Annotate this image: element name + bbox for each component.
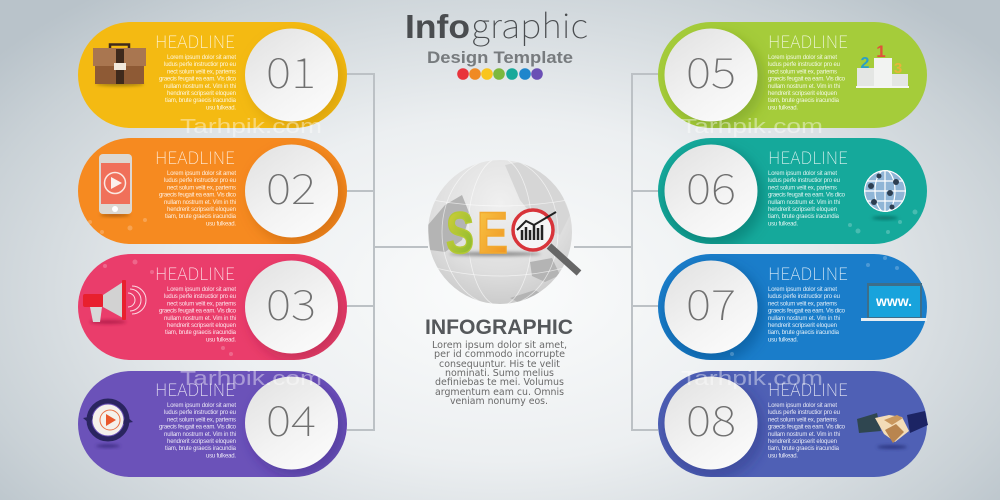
panel: 03 — [78, 254, 347, 361]
body text: nect solum velit ex, partems — [167, 185, 236, 191]
number circle: 02 — [266, 156, 316, 217]
panel: 06 — [658, 138, 927, 247]
magnifier with chart — [513, 210, 579, 273]
body text: usu fulkead. — [206, 105, 236, 111]
body text: graecis feugait ea eam. Vis dico — [768, 309, 846, 315]
number circle — [664, 376, 758, 470]
colour dots — [457, 68, 543, 80]
icon: laptop www — [861, 283, 927, 321]
body text: ludus perfe instructior pro eu — [164, 410, 236, 416]
headline: HEADLINE — [155, 145, 235, 170]
body text: usu fulkead. — [206, 453, 236, 459]
body text — [159, 287, 237, 343]
body text: ludus perfe instructior pro eu — [164, 178, 236, 184]
subtitle: Design Template — [427, 48, 573, 67]
body text — [768, 55, 846, 111]
body text: usu fulkead. — [206, 221, 236, 227]
icon: SEO globe — [428, 158, 579, 306]
headline: HEADLINE — [155, 377, 235, 402]
seo letters: S — [446, 201, 474, 266]
body text: Lorem ipsum dolor sit amet — [167, 171, 236, 177]
headline: HEADLINE — [155, 261, 235, 286]
body text: usu fulkead. — [768, 221, 798, 227]
left connector lines — [347, 74, 428, 430]
body text: Lorem ipsum dolor sit amet — [167, 287, 236, 293]
body text: tiam, brute graecis iracundia — [768, 214, 840, 220]
right connector lines — [574, 74, 658, 430]
body text — [159, 171, 237, 227]
body text: hendrerit scripserit eloquen — [167, 439, 236, 445]
seo letters: E — [477, 201, 508, 266]
title — [405, 0, 588, 48]
body text: nullam nostrum et. Vim in thi — [164, 200, 236, 206]
body text: usu fulkead. — [206, 337, 236, 343]
panel: 02 — [78, 138, 347, 245]
number circle: 07 — [686, 272, 736, 333]
body text — [768, 171, 846, 227]
body text: graecis feugait ea eam. Vis dico — [768, 425, 846, 431]
body text: Lorem ipsum dolor sit amet — [768, 171, 837, 177]
center paragraph: consequuntur. His te velit — [439, 359, 560, 370]
body text: hendrerit scripserit eloquen — [167, 91, 236, 97]
watermarks: Tarhpik.com — [681, 116, 823, 138]
number circle: 08 — [686, 388, 736, 449]
body text: ludus perfe instructior pro eu — [768, 294, 840, 300]
body text: ludus perfe instructior pro eu — [768, 62, 840, 68]
center paragraph: definiebas te mei. Volumus — [435, 377, 564, 388]
body text: graecis feugait ea eam. Vis dico — [768, 77, 846, 83]
body text: graecis feugait ea eam. Vis dico — [159, 193, 237, 199]
body text: tiam, brute graecis iracundia — [165, 214, 237, 220]
title: Info — [405, 8, 470, 45]
body text: hendrerit scripserit eloquen — [768, 91, 837, 97]
panel: 01 — [78, 22, 347, 129]
center paragraph — [432, 340, 567, 407]
body text: ludus perfe instructior pro eu — [164, 62, 236, 68]
body text — [159, 55, 237, 111]
panel: 04 — [78, 371, 347, 477]
body text: tiam, brute graecis iracundia — [165, 98, 237, 104]
body text: tiam, brute graecis iracundia — [768, 330, 840, 336]
watermarks: Tarhpik.com — [180, 368, 322, 390]
body text: nect solum velit ex, partems — [768, 185, 837, 191]
body text: tiam, brute graecis iracundia — [768, 98, 840, 104]
center paragraph: veniam nonumy eos. — [450, 396, 548, 407]
panel: 08 — [658, 371, 928, 479]
body text: nullam nostrum et. Vim in thi — [768, 316, 840, 322]
body text: tiam, brute graecis iracundia — [768, 446, 840, 452]
headline: HEADLINE — [768, 377, 848, 402]
number circle: 05 — [686, 40, 736, 101]
body text: ludus perfe instructior pro eu — [164, 294, 236, 300]
body text: Lorem ipsum dolor sit amet — [167, 403, 236, 409]
icon: megaphone — [83, 280, 146, 324]
body text: nullam nostrum et. Vim in thi — [164, 84, 236, 90]
body text: usu fulkead. — [768, 453, 798, 459]
number circle: 06 — [686, 156, 736, 217]
body text: nullam nostrum et. Vim in thi — [768, 84, 840, 90]
body text: hendrerit scripserit eloquen — [167, 323, 236, 329]
icon: laptop www: www. — [875, 293, 912, 309]
body text — [159, 403, 237, 459]
body text: usu fulkead. — [768, 105, 798, 111]
headline: HEADLINE — [768, 145, 848, 170]
infographic canvas — [78, 12, 928, 477]
number circle: 01 — [266, 40, 316, 101]
body text: tiam, brute graecis iracundia — [165, 330, 237, 336]
center paragraph: Lorem ipsum dolor sit amet, — [432, 340, 567, 351]
body text: Lorem ipsum dolor sit amet — [768, 287, 837, 293]
body text: graecis feugait ea eam. Vis dico — [159, 77, 237, 83]
body text: Lorem ipsum dolor sit amet — [167, 55, 236, 61]
number circle — [245, 260, 338, 354]
headline: HEADLINE — [155, 29, 235, 54]
watermarks: Tarhpik.com — [180, 116, 322, 138]
icon: podium: 1 — [876, 42, 886, 61]
icon: video cycle — [83, 401, 133, 448]
body text — [768, 287, 846, 343]
title: graphic — [471, 0, 588, 48]
body text: hendrerit scripserit eloquen — [768, 323, 837, 329]
headline: HEADLINE — [768, 261, 848, 286]
body text — [768, 403, 846, 459]
number circle: 04 — [266, 388, 316, 449]
watermarks: Tarhpik.com — [681, 368, 823, 390]
body text: tiam, brute graecis iracundia — [165, 446, 237, 452]
body text: hendrerit scripserit eloquen — [768, 207, 837, 213]
panel: 07 — [658, 254, 927, 363]
icon: handshake — [857, 411, 928, 449]
body text: nullam nostrum et. Vim in thi — [768, 432, 840, 438]
seo letters — [446, 201, 508, 266]
body text: hendrerit scripserit eloquen — [167, 207, 236, 213]
body text: nect solum velit ex, partems — [768, 301, 837, 307]
body text: ludus perfe instructior pro eu — [768, 410, 840, 416]
icon: people globe — [864, 170, 906, 220]
center heading: INFOGRAPHIC — [425, 316, 573, 339]
body text: hendrerit scripserit eloquen — [768, 439, 837, 445]
center paragraph: per id commodo incorrupte — [434, 349, 565, 360]
body text: nect solum velit ex, partems — [768, 69, 837, 75]
number circle — [245, 28, 338, 122]
body text: nect solum velit ex, partems — [167, 69, 236, 75]
number circle — [245, 376, 338, 470]
watermarks — [180, 116, 823, 390]
number circle — [664, 28, 758, 122]
number circle — [664, 260, 758, 354]
body text: nullam nostrum et. Vim in thi — [164, 316, 236, 322]
number circle: 03 — [266, 272, 316, 333]
icon: briefcase — [93, 44, 146, 86]
body text: nect solum velit ex, partems — [768, 417, 837, 423]
number circle — [245, 144, 338, 238]
body text: graecis feugait ea eam. Vis dico — [768, 193, 846, 199]
body text: Lorem ipsum dolor sit amet — [768, 403, 837, 409]
body text: usu fulkead. — [768, 337, 798, 343]
center paragraph: argmentum eam cu. Omnis — [435, 387, 564, 398]
headline: HEADLINE — [768, 29, 848, 54]
body text: nect solum velit ex, partems — [167, 301, 236, 307]
icon: podium: 3 — [894, 60, 902, 77]
icon: smartphone — [99, 154, 132, 216]
icon: podium — [856, 42, 909, 88]
body text: graecis feugait ea eam. Vis dico — [159, 425, 237, 431]
body text: nect solum velit ex, partems — [167, 417, 236, 423]
icon: podium: 2 — [861, 55, 870, 72]
body text: graecis feugait ea eam. Vis dico — [159, 309, 237, 315]
number circle — [664, 144, 758, 238]
body text: ludus perfe instructior pro eu — [768, 178, 840, 184]
body text: nullam nostrum et. Vim in thi — [164, 432, 236, 438]
body text: Lorem ipsum dolor sit amet — [768, 55, 837, 61]
center paragraph: nominati. Sumo melius — [445, 368, 554, 379]
panel: 05 — [658, 22, 927, 129]
body text: nullam nostrum et. Vim in thi — [768, 200, 840, 206]
